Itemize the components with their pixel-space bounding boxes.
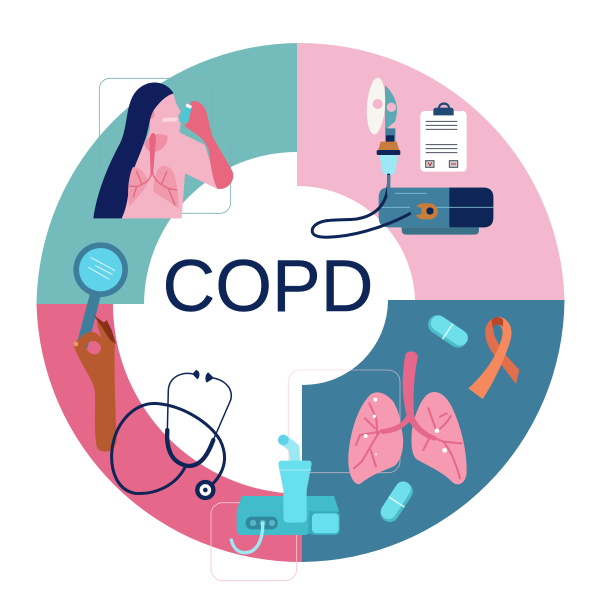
right small lung [153,166,179,208]
mask holes [373,99,383,109]
ear tip left [192,370,199,379]
frame: back square [99,78,212,181]
hand [74,320,117,452]
right lung [411,392,467,484]
ear [149,109,155,119]
side button [312,513,339,533]
arm [184,101,233,189]
windpipe [149,133,156,175]
plug [410,205,421,215]
illustration: tabletop nebulizer [211,435,340,581]
hose top [384,175,394,195]
quadrant: blue bottom-right [302,300,564,562]
clipboard [420,111,467,172]
machine base [402,227,479,235]
neck [385,128,395,142]
binaural right [213,378,231,440]
lens glints [88,257,115,279]
cup [278,461,312,523]
pill top [424,311,471,351]
frame: over blue [288,370,400,473]
check mark [428,162,432,166]
machine dark end [449,188,493,227]
illustration: lungs pills ribbon [288,311,519,526]
mask shell [365,77,387,135]
device front [237,512,310,535]
illustration: hand with magnifier [73,242,128,452]
minus box [449,161,458,167]
machine body [379,188,493,227]
hose [312,175,413,237]
plug socket [426,207,434,215]
inhaler puff [162,117,177,122]
left lung [348,392,403,484]
minus mark [451,162,456,165]
magnifier lens [79,248,122,291]
magnifier ring [73,242,128,297]
frame [211,503,297,581]
mask cup [385,85,397,130]
tube [231,523,263,553]
mask hole right [387,103,396,112]
device top [237,496,339,512]
illustration: nebulizer mask and compressor [312,77,493,237]
inhaler [179,103,192,122]
cup line [279,468,311,471]
ear tip right [205,372,214,383]
torso [122,93,218,218]
ribbon fold [492,317,503,328]
small bronchi [130,172,177,205]
pill bottom [377,478,416,526]
yoke [167,430,213,466]
quadrant: rose bottom-left [36,304,302,562]
hair [93,82,174,218]
illustration: stethoscope [112,370,231,498]
plug plate [415,203,438,219]
clip [433,102,454,115]
cup ring [377,150,400,155]
mouthpiece [284,440,295,464]
chest piece [197,482,213,498]
fingers dark [93,315,116,344]
left small lung [128,167,148,207]
collar dark [386,135,394,142]
ribbon front strand [468,317,512,399]
socket panel [246,517,278,529]
quadrant: teal top-left [36,43,297,304]
clip hole [440,105,448,108]
frame: front square [170,135,231,213]
sockets [249,519,276,527]
ribbon back strand [485,318,519,384]
medicine chamber [379,155,398,175]
illustration: woman using inhaler [93,78,233,218]
cup orange [378,142,399,151]
tube loop [112,403,225,494]
binaural left [167,373,193,430]
lung sparkles [364,398,447,455]
thumb nail [74,342,78,346]
clipboard lines [426,121,457,153]
magnifier handle [77,293,101,348]
chest piece center [203,488,208,492]
quadrant: pink top-right [297,43,564,300]
bronchi [354,403,462,478]
trachea [380,351,437,441]
throat [144,134,167,152]
checkbox [426,161,434,167]
inhaler cap [186,103,192,109]
mouthpiece tip [278,435,289,445]
title: COPD [163,246,373,327]
machine seam [379,193,493,207]
device side [308,512,340,535]
